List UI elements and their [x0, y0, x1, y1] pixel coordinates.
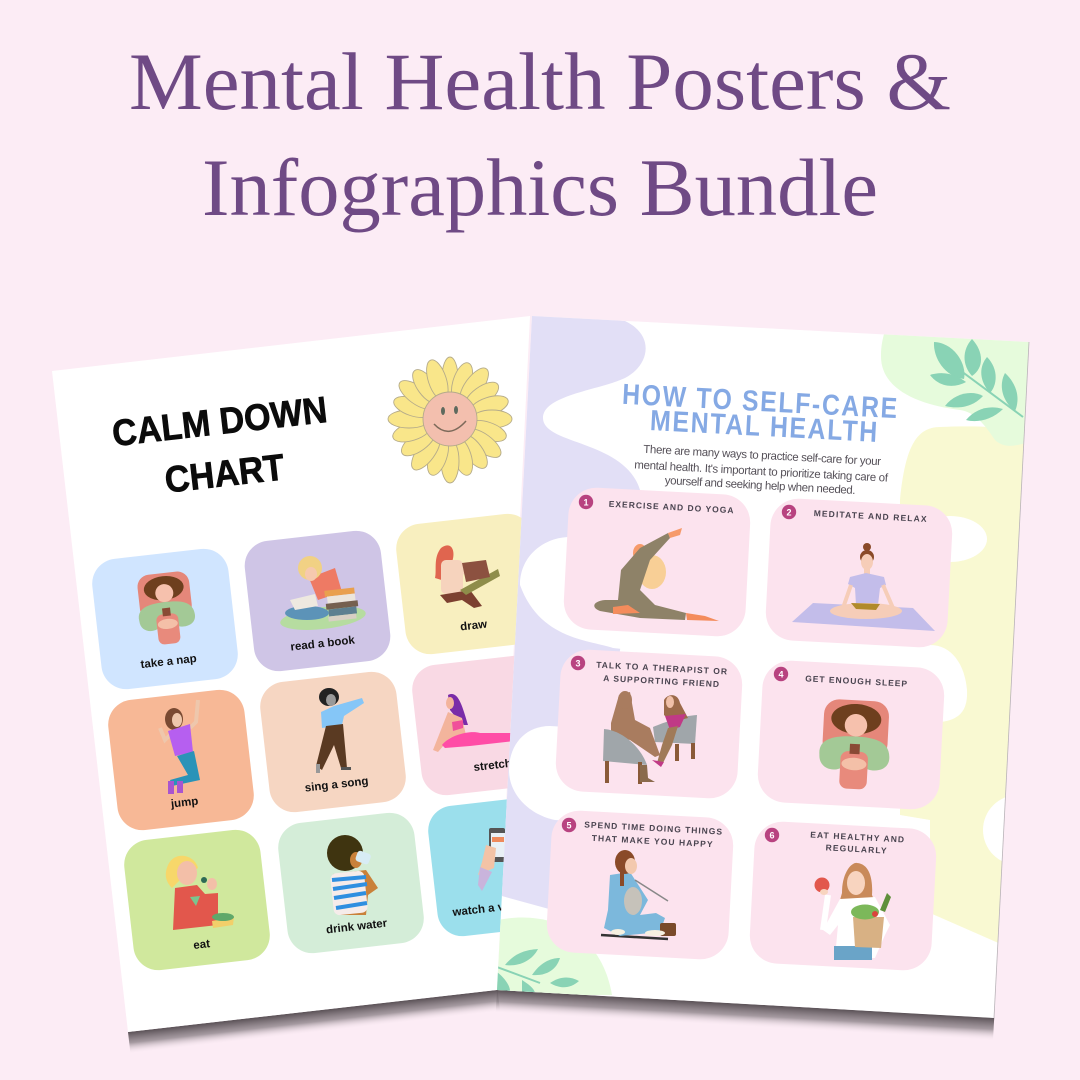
illustration: reading with books [279, 556, 367, 634]
icon: leaves bottom left [497, 949, 579, 993]
badge 5: 5 [566, 820, 572, 830]
card: drink water [276, 810, 426, 956]
card 4: get enough sleep [756, 659, 946, 811]
illustration: meditation on mat [792, 543, 935, 631]
badge 3 [571, 656, 585, 670]
illustration: person drawing [435, 545, 500, 608]
card heading: MEDITATE AND RELAX [813, 508, 927, 524]
poster shadow [496, 990, 994, 1041]
label: take a nap [140, 653, 197, 671]
poster sheet [52, 316, 530, 1032]
poster shadow [128, 990, 500, 1054]
panel: how to self-care poster [480, 310, 1053, 1041]
badge 2 [782, 505, 796, 519]
heading: how to self-care mental health: MENTAL HEALTH [649, 405, 880, 449]
badge 6 [765, 828, 779, 842]
title [129, 36, 951, 233]
heading: how to self-care mental health [621, 379, 900, 449]
illustration: person knitting [601, 850, 676, 939]
card: draw [394, 511, 544, 657]
badge 5 [562, 818, 576, 832]
intro text [634, 444, 889, 497]
heading: calm down chart [110, 389, 329, 501]
card: take a nap [90, 546, 240, 692]
title: Infographics Bundle [202, 142, 878, 233]
illustration: jumping person [160, 700, 200, 794]
heading: calm down chart: CHART [163, 446, 287, 501]
card heading: THAT MAKE YOU HAPPY [591, 833, 713, 849]
card heading [596, 660, 727, 689]
badge 2: 2 [786, 508, 792, 518]
panel: calm down chart poster [52, 316, 576, 1054]
illustration: person eating salad [166, 856, 234, 930]
label: watch a video [451, 899, 528, 919]
poster sheet [497, 316, 1029, 1018]
card: sing a song [258, 669, 408, 815]
icon: smiling sunflower [388, 357, 512, 483]
title: Mental Health Posters & [129, 36, 951, 127]
intro text: mental health. It's important to prioritize taking care of [634, 459, 889, 485]
card: watch a video [426, 793, 576, 939]
card heading: REGULARLY [825, 842, 887, 856]
background blobs [480, 310, 1053, 995]
illustration: hand holding phone [478, 828, 505, 891]
label: eat [193, 938, 211, 952]
illustration: two people talking [603, 691, 697, 784]
icon: leaves top right [930, 339, 1023, 421]
label: jump [169, 796, 199, 811]
illustration: stretching person [433, 694, 515, 752]
badge 3: 3 [575, 658, 581, 668]
card: jump [106, 687, 256, 833]
label: draw [460, 619, 488, 634]
label: sing a song [304, 775, 369, 795]
badge 6: 6 [769, 830, 775, 840]
heading: calm down chart: CALM DOWN [110, 389, 329, 454]
card 1: exercise and do yoga [562, 486, 752, 638]
card 2: meditate and relax [764, 497, 954, 649]
card heading: SPEND TIME DOING THINGS [584, 819, 723, 837]
card 6: eat healthy and regularly [748, 820, 938, 972]
card: stretch [410, 652, 560, 798]
intro text: There are many ways to practice self-care for your [643, 444, 881, 468]
badge 4: 4 [778, 670, 784, 680]
card heading: EAT HEALTHY AND [810, 830, 904, 844]
intro text: yourself and seeking help when needed. [664, 475, 856, 497]
label: drink water [325, 918, 388, 936]
illustration: person with groceries [814, 863, 891, 960]
illustration: person drinking water [327, 835, 378, 916]
card 3: talk to a therapist [554, 648, 744, 800]
card heading: A SUPPORTING FRIEND [603, 673, 719, 689]
card: eat [122, 827, 272, 973]
label: stretch [473, 758, 512, 774]
card heading: EXERCISE AND DO YOGA [608, 499, 734, 515]
illustration: singing person [316, 688, 364, 773]
card heading [584, 819, 723, 849]
illustration: person with hot water bottle [134, 570, 198, 647]
badge 1 [579, 495, 593, 509]
badge 1: 1 [583, 498, 589, 508]
card: read a book [242, 528, 393, 674]
illustration: yoga pose [594, 528, 719, 621]
card 5: spend time doing things [545, 809, 735, 961]
card heading: GET ENOUGH SLEEP [805, 673, 908, 689]
heading: how to self-care mental health: HOW TO SELF-CARE [621, 379, 900, 425]
badge 4 [774, 667, 788, 681]
card heading [810, 830, 904, 856]
label: read a book [290, 634, 356, 654]
illustration: person with hot water bottle [818, 698, 892, 791]
card heading: TALK TO A THERAPIST OR [596, 660, 727, 676]
poster right edge [994, 342, 1029, 1018]
